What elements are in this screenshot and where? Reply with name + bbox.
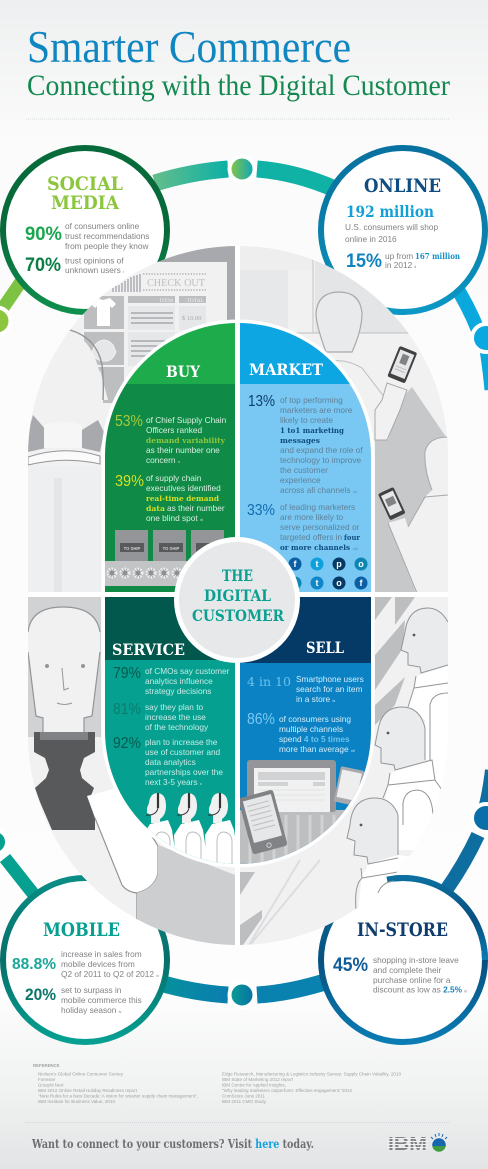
stat: 39%: of supply chain xyxy=(146,473,202,483)
central panels white rim xyxy=(105,323,371,864)
dark tie block xyxy=(34,732,95,830)
person profile 2 xyxy=(375,707,442,850)
stat: 15%: in 2012 ii xyxy=(385,260,416,270)
references: REFERENCE xyxy=(33,1063,60,1068)
call to action: Want to connect to your customers? Visit here today. xyxy=(31,1137,314,1151)
stat: 88.8%: 88.8% xyxy=(12,956,56,973)
stat: 33%: of leading marketers xyxy=(280,502,355,512)
stat: 13%: experience xyxy=(280,475,321,485)
stat: 39% xyxy=(115,473,225,523)
checkout table: TOTAL xyxy=(187,298,205,304)
stat: 81%: 81% xyxy=(113,701,141,718)
circle: in-store xyxy=(321,878,485,1042)
stat: 13%: and expand the role of xyxy=(280,445,363,455)
stat: 90%: of consumers online xyxy=(65,221,140,231)
stat: 15%: 167 million xyxy=(415,251,460,261)
stat: 70%: unknown users i xyxy=(65,265,124,275)
stat: 13%: across all channels vii xyxy=(280,485,357,495)
stat: 33%: serve personalized or xyxy=(280,522,360,532)
stat: 86% xyxy=(247,711,355,754)
references: ComScore June 2011 xyxy=(222,1094,266,1098)
connecting ring bands xyxy=(0,169,488,995)
stat: 53%: 53% xyxy=(115,413,143,430)
stat: 79%: 79% xyxy=(113,665,141,682)
stat: 20% xyxy=(25,985,142,1015)
heading: market: MARKET xyxy=(249,360,323,379)
stat: 4 in 10: in a store ix xyxy=(296,694,335,704)
stat: 4 in 10: 4 in 10 xyxy=(247,675,291,689)
ring nodes xyxy=(0,156,488,1008)
stat: 70%: trust opinions of xyxy=(65,256,124,266)
stat: 92%: use of customer and xyxy=(145,747,221,757)
heading: buy: BUY xyxy=(166,362,201,381)
stat: 53%: Officers ranked xyxy=(146,425,202,435)
stat: 13%: of top performing xyxy=(280,395,343,405)
stat: 92% xyxy=(113,735,223,787)
stat: 13%: messages xyxy=(280,436,321,445)
quadrant: customers in profile xyxy=(240,597,448,960)
stat: 39%: data xyxy=(146,504,165,513)
stat: 86%: 86% xyxy=(247,711,275,728)
stat: 20%: holiday season iv xyxy=(61,1005,122,1015)
stat: 86%: spend 4 to 5 times xyxy=(279,734,350,744)
stat: 13% xyxy=(248,393,363,495)
references: IBM Institute for Business Value, 2010 xyxy=(38,1099,116,1104)
stat: 33%: viii xyxy=(353,546,358,551)
icons: social networks: f xyxy=(294,559,298,569)
references: GroupM Next xyxy=(38,1082,64,1088)
stat: 33%: are more likely to xyxy=(280,512,344,522)
stat: 88.8%: Q2 of 2011 to Q2 of 2012 iv xyxy=(61,969,159,979)
heading: social media: SOCIAL xyxy=(47,173,123,195)
icons: call centre agents xyxy=(146,793,235,864)
panel: buy xyxy=(105,323,235,592)
stat: 88.8% xyxy=(12,949,159,979)
person profile 3 xyxy=(346,798,409,909)
quadrant: customer portrait xyxy=(28,597,235,947)
stat: 53%: demand variability xyxy=(146,436,225,445)
stat: 4 in 10 xyxy=(247,674,364,704)
stat: 79%: strategy decisions xyxy=(145,686,211,696)
stat: 88.8%: increase in sales from xyxy=(61,949,142,959)
panel: service xyxy=(105,597,237,880)
references: Nielsen's Global Online Consumer Survey xyxy=(38,1072,124,1076)
IBM logo: IBM xyxy=(388,1134,427,1154)
stat: 70%: 70% xyxy=(25,255,61,276)
stat: 90%: 90% xyxy=(25,224,62,245)
icons: social networks: f xyxy=(360,578,364,588)
stat: 81%: of the technology xyxy=(145,722,209,732)
second shopper xyxy=(388,437,448,595)
heading: mobile: MOBILE xyxy=(43,919,120,941)
stat: 192 million: 192 million xyxy=(346,202,434,221)
stat: 20%: 20% xyxy=(25,985,56,1004)
stat: 13%: the customer xyxy=(280,465,328,475)
stat: 86%: more than average vii xyxy=(279,744,355,754)
stat: 79%: of CMOs say customer xyxy=(145,666,230,676)
stat: 90%: from people they know xyxy=(65,241,149,251)
gray backdrop xyxy=(375,387,448,595)
stat: 13%: technology to improve xyxy=(280,455,362,465)
stat: 90%: trust recommendations xyxy=(65,231,149,241)
stat: 45%: purchase online for a xyxy=(373,975,451,985)
references: "Why leading marketers outperform: Effective engagement,"2012 xyxy=(222,1088,353,1093)
stat: 33%: four xyxy=(344,533,361,542)
heading: social media: MEDIA xyxy=(51,192,119,214)
shopper: back of head and collar xyxy=(28,330,105,593)
references: IBM 2012 Online Retail Holiday Readiness report xyxy=(38,1088,138,1093)
stat: 45%: and complete their xyxy=(373,965,441,975)
stat: 192 million xyxy=(345,202,439,244)
stat: 45%: shopping in-store leave xyxy=(373,955,459,965)
icons: social networks xyxy=(288,558,368,590)
centre badge: the digital customer xyxy=(174,537,300,663)
stat: 53% xyxy=(115,413,227,465)
stat: 4 in 10: Smartphone users xyxy=(296,674,364,684)
stat: 81%: increase the use xyxy=(145,712,206,722)
gray base xyxy=(137,845,235,947)
product tiles xyxy=(84,296,124,403)
centre badge: the digital customer: THE xyxy=(222,566,253,585)
stat: 39%: 39% xyxy=(115,473,144,490)
stat: 39%: executives identified xyxy=(146,483,221,493)
centre badge: the digital customer: DIGITAL xyxy=(204,586,271,605)
stat: 53%: concern v xyxy=(146,455,180,465)
stat: 192 million: online in 2016 xyxy=(345,234,397,244)
stat: 86%: of consumers using xyxy=(279,714,351,724)
stat: 13%: likely to create xyxy=(280,415,333,425)
sleeve and arm: upper xyxy=(375,383,407,440)
heading: online: ONLINE xyxy=(364,175,441,197)
stat: 45%: discount as low as 2.5% iii xyxy=(373,984,467,994)
IBM logo xyxy=(387,1133,447,1154)
icon: to-ship boxes on conveyor: TO SHIP xyxy=(163,546,180,551)
quadrant: shoppers with phones xyxy=(240,245,448,595)
references: "New Rules for a New Decade: A vision for smarter supply chain management", xyxy=(38,1094,198,1098)
stat: 79%: analytics influence xyxy=(145,676,213,686)
circle: mobile xyxy=(3,878,167,1042)
stat: 90% xyxy=(25,221,149,251)
stat: 92%: partnerships over the xyxy=(145,767,223,777)
shirt panel xyxy=(87,788,158,893)
quadrant: checkout screen and shopper xyxy=(28,245,235,593)
references: Edge Research, Manufacturing & Logistics Industry Survey: Supply Chain Volatility, 2010 xyxy=(222,1072,402,1076)
icon: to-ship boxes on conveyor xyxy=(105,530,235,586)
stat: 88.8%: mobile devices from xyxy=(61,959,135,969)
checkout table: $ 10.00 xyxy=(182,315,202,322)
centre badge: the digital customer: CUSTOMER xyxy=(192,606,285,625)
phone: upper xyxy=(387,346,417,384)
heading: sell: SELL xyxy=(306,638,344,657)
stat: 33%: targeted offers in xyxy=(280,532,342,542)
panel: market xyxy=(240,323,371,592)
stat: 45%: 45% xyxy=(333,955,368,976)
checkout table xyxy=(128,296,206,366)
stat: 13%: marketers are more xyxy=(280,405,353,415)
title: Smarter Commerce xyxy=(27,22,351,72)
stat: 33%: or more channels xyxy=(280,543,351,552)
heading: in-store: IN-STORE xyxy=(357,919,448,941)
stat: 53%: of Chief Supply Chain xyxy=(146,415,227,425)
stat: 20%: mobile commerce this xyxy=(61,995,142,1005)
stat: 39%: real-time demand xyxy=(146,494,220,503)
references: Forrester xyxy=(38,1077,56,1082)
stat: 15%: up from xyxy=(385,251,413,261)
icons: social networks: o xyxy=(336,578,342,588)
stat: 13%: 1 to1 marketing xyxy=(280,426,344,435)
label: check out: CHECK OUT xyxy=(147,277,205,289)
heading: social media xyxy=(47,173,123,214)
stat: 86%: multiple channels xyxy=(279,724,343,734)
stat: 39%: one blind spot vi xyxy=(146,513,203,523)
stat: 4 in 10: search for an item xyxy=(296,684,362,694)
checkout table: ITEM xyxy=(160,298,173,304)
stat: 39%: as their number xyxy=(167,503,225,513)
stat: 81%: say they plan to xyxy=(145,702,204,712)
stat: 92%: plan to increase the xyxy=(145,737,218,747)
stat: 15% xyxy=(346,251,460,272)
stat: 92%: 92% xyxy=(113,735,141,752)
heading: service: SERVICE xyxy=(112,640,185,659)
shopper head from behind xyxy=(316,292,385,398)
stat: 79% xyxy=(113,665,230,696)
icon: to-ship boxes on conveyor: TO SHIP xyxy=(124,546,141,551)
references: IBM 2011 CMO Study xyxy=(222,1099,267,1104)
title: Connecting with the Digital Customer xyxy=(27,70,450,102)
stat: 20%: set to surpass in xyxy=(61,985,122,995)
person profile 1 xyxy=(401,608,448,800)
stat: 45% xyxy=(333,955,467,994)
phone: lower xyxy=(378,487,406,520)
references xyxy=(33,1063,402,1104)
circle: social media xyxy=(3,148,167,312)
stat: 70% xyxy=(25,255,124,276)
stat: 192 million: U.S. consumers will shop xyxy=(345,222,439,232)
stat: 81% xyxy=(113,701,209,732)
references: IBM Center for Applied Insights, xyxy=(222,1082,286,1088)
face xyxy=(28,607,100,735)
icons: social networks: t xyxy=(316,559,318,569)
stat: 33% xyxy=(247,502,361,552)
in-store ring top segment xyxy=(387,878,485,960)
title xyxy=(27,22,450,102)
icons: social networks: o xyxy=(358,559,364,569)
icon: laptop and tablets xyxy=(238,760,371,875)
stat: 33%: 33% xyxy=(247,502,275,519)
stat: 92%: data analytics xyxy=(145,757,196,767)
panel: sell xyxy=(238,597,371,875)
illustration surround xyxy=(28,245,448,960)
circle: online xyxy=(321,148,485,312)
stat: 15%: 15% xyxy=(346,251,382,272)
references: IBM State of Marketing 2012 report xyxy=(222,1077,294,1082)
stat: 13%: 13% xyxy=(248,393,275,410)
stat: 53%: as their number one xyxy=(146,445,220,455)
stat: 92%: next 3-5 years x xyxy=(145,777,202,787)
icons: social networks: p xyxy=(336,559,342,569)
icons: social networks: t xyxy=(316,578,318,588)
